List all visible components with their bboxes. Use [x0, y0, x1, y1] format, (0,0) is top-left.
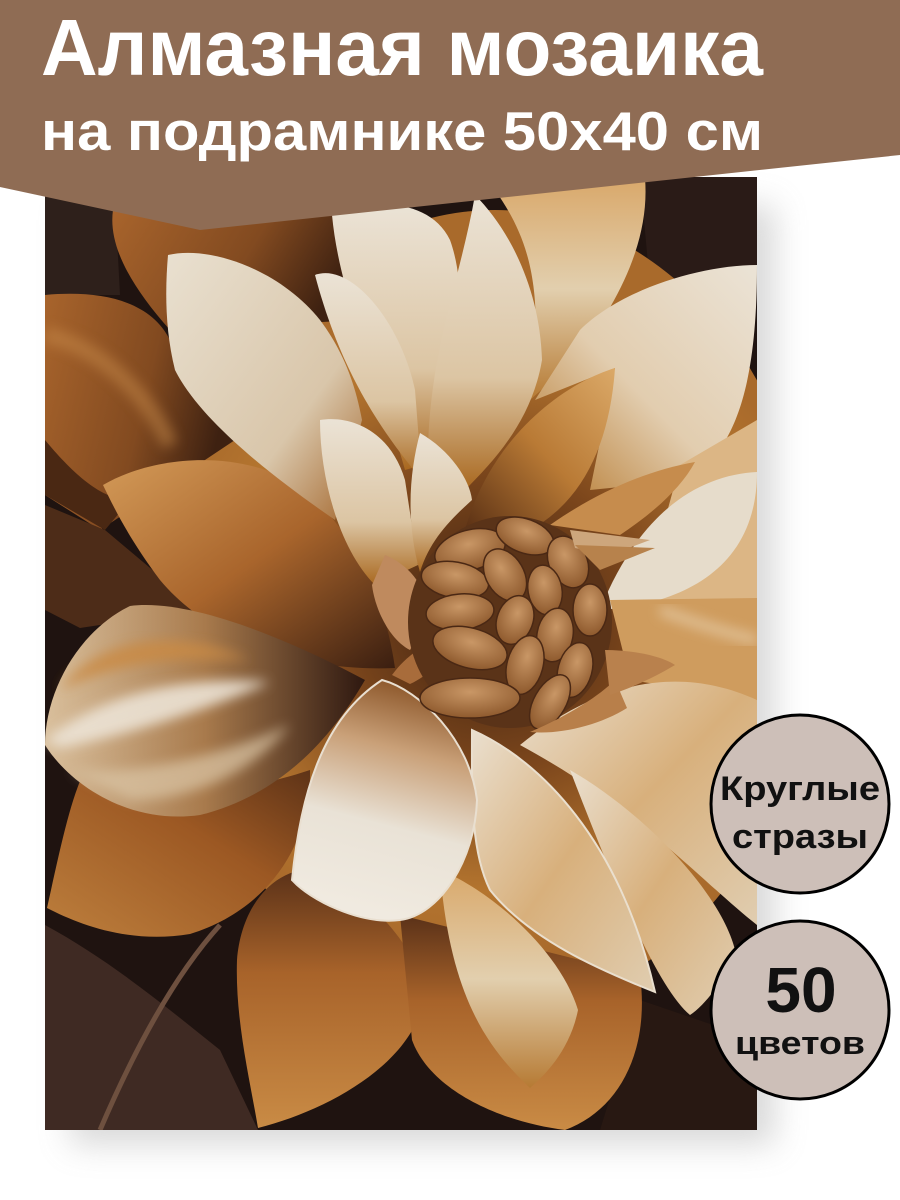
title: Алмазная мозаика — [41, 3, 763, 92]
left petals — [45, 460, 395, 817]
painting: dahlia flower — [45, 177, 815, 1130]
badge: round rhinestones: Круглые — [720, 770, 880, 808]
badge: 50 colours — [711, 921, 889, 1099]
badge: 50 colours: цветов — [735, 1025, 865, 1061]
upper cream petals — [166, 178, 757, 520]
painting background — [45, 177, 757, 1130]
badge: round rhinestones: стразы — [732, 818, 868, 856]
badge: 50 colours: 50 — [765, 954, 837, 1026]
flower underlay — [204, 210, 757, 962]
canvas shadow — [70, 205, 775, 1145]
flower center — [408, 510, 675, 736]
inner petals — [320, 419, 472, 684]
badge: round rhinestones — [711, 715, 889, 893]
back petals — [45, 210, 642, 1130]
right petals — [465, 368, 757, 925]
top banner — [0, 0, 900, 230]
subtitle: на подрамнике 50х40 см — [41, 100, 763, 162]
lower petals — [292, 680, 735, 1088]
dark leaves — [45, 177, 757, 1130]
